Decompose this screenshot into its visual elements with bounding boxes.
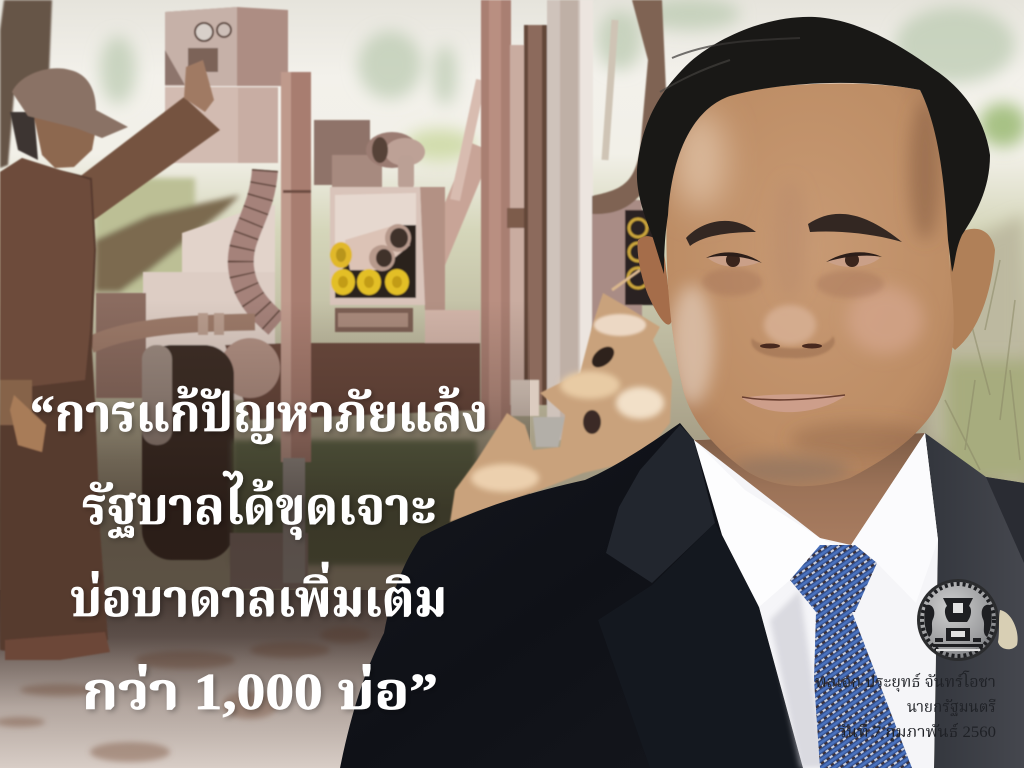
grass right bbox=[930, 215, 1024, 490]
attribution text: วันที่ 7 กุมภาพันธ์ 2560 bbox=[838, 720, 996, 743]
head bbox=[33, 112, 96, 168]
attribution text: พลเอก ประยุทธ์ จันทร์โอชา bbox=[815, 671, 996, 693]
raised arm bbox=[78, 97, 220, 220]
ground bbox=[0, 590, 520, 768]
drill machine bbox=[90, 0, 666, 589]
attribution text bbox=[815, 671, 996, 743]
ears bbox=[637, 229, 995, 350]
tractor block bbox=[182, 205, 275, 272]
lower chassis bbox=[142, 310, 480, 560]
control box bbox=[165, 7, 288, 163]
main vertical pole bbox=[281, 72, 311, 462]
nose bbox=[751, 305, 835, 358]
water splash bbox=[450, 270, 672, 522]
torso and legs bbox=[0, 158, 108, 660]
prime minister portrait bbox=[340, 17, 1024, 768]
engine pulley and rear parts bbox=[314, 80, 481, 345]
jacket right bbox=[925, 433, 1024, 768]
mouth bbox=[742, 394, 845, 412]
mud patches bbox=[0, 627, 370, 762]
quote headline: “การแก้ปัญหาภัยแล้ง bbox=[32, 388, 490, 446]
background trees bbox=[100, 0, 1024, 161]
undergrowth left bbox=[95, 178, 240, 293]
face bbox=[666, 83, 954, 486]
rear machine near head bbox=[592, 0, 666, 330]
pipe holder box bbox=[330, 187, 425, 332]
pipes bbox=[330, 224, 411, 295]
eyes bbox=[706, 252, 882, 267]
drill mast bbox=[481, 0, 593, 440]
shirt bbox=[694, 433, 938, 768]
worker bbox=[0, 60, 220, 660]
collar bbox=[694, 440, 835, 607]
lapel pin bbox=[998, 610, 1018, 649]
dark overlay behind text bbox=[0, 300, 530, 768]
quote headline: บ่อบาดาลเพิ่มเติม bbox=[72, 564, 449, 630]
tie bbox=[790, 545, 912, 768]
eyebrows bbox=[686, 221, 756, 246]
seal of the prime minister's office bbox=[917, 579, 999, 661]
jacket left bbox=[340, 423, 803, 768]
headline line 4: กว่า 1,000 บ่อ” bbox=[82, 664, 438, 721]
headline line 2: รัฐบาลได้ขุดเจาะ bbox=[82, 471, 436, 540]
headline line 1: “การแก้ปัญหาภัยแล้ง bbox=[30, 386, 488, 444]
quote headline bbox=[30, 386, 490, 723]
hair bbox=[637, 17, 990, 274]
cap bbox=[12, 68, 128, 138]
tree trunk bbox=[0, 0, 52, 168]
quote headline: รัฐบาลได้ขุดเจาะ bbox=[84, 473, 438, 542]
headline line 3: บ่อบาดาลเพิ่มเติม bbox=[70, 562, 447, 628]
ribbed hose bbox=[241, 170, 277, 325]
quote headline: กว่า 1,000 บ่อ” bbox=[84, 666, 440, 723]
horizontal hose bbox=[90, 322, 255, 345]
neck bbox=[694, 433, 925, 545]
collar notch bbox=[606, 425, 715, 583]
green grass below machine bbox=[232, 440, 477, 565]
attribution text: นายกรัฐมนตรี bbox=[907, 698, 996, 716]
lower lapel bbox=[598, 523, 803, 768]
